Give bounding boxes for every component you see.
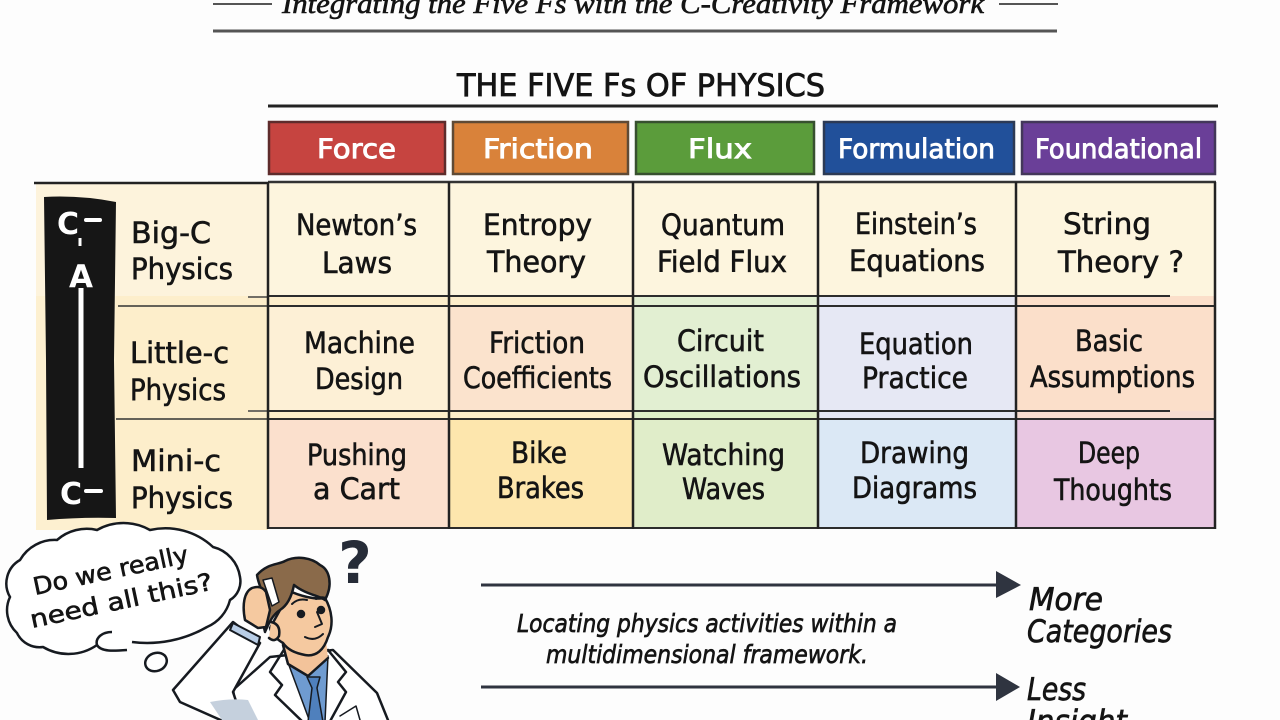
hand — [244, 587, 270, 628]
question mark: ? — [338, 529, 372, 597]
label: Less Insight: Less — [1027, 672, 1086, 708]
smile — [305, 634, 323, 639]
shirt — [287, 656, 328, 720]
cell: Friction Coefficients: Coefficients — [463, 361, 612, 395]
cell: Machine Design — [304, 326, 415, 396]
cell: Circuit Oscillations: Oscillations — [643, 360, 801, 394]
cell: Einstein's Equations: Equations — [849, 244, 985, 278]
cell: String Theory ?: Theory ? — [1057, 245, 1184, 279]
cell: Watching Waves: Watching — [662, 438, 785, 472]
cell: Entropy Theory: Theory — [486, 245, 586, 279]
scientist character — [173, 558, 392, 720]
label: Big-C Physics: Big-C — [131, 216, 211, 250]
head — [270, 590, 332, 655]
header: Friction — [453, 122, 628, 174]
label: More Categories: Categories — [1027, 614, 1172, 650]
cell: String Theory ? — [1057, 207, 1184, 279]
coat pocket — [340, 706, 360, 720]
header: Foundational — [1022, 122, 1215, 174]
cell: Newton's Laws: Laws — [322, 246, 392, 280]
brows and nose — [292, 597, 326, 627]
title: the five Fs of physics: THE FIVE Fs OF PHYSICS — [456, 68, 825, 104]
neck — [283, 640, 328, 676]
cell: Circuit Oscillations: Circuit — [677, 324, 764, 358]
cell: Einstein's Equations — [849, 207, 985, 278]
creativity scale bar: A — [69, 259, 93, 295]
header: Force: Force — [317, 134, 396, 165]
cell: Machine Design: Design — [315, 362, 403, 396]
label: Little-c Physics: Little-c — [130, 336, 229, 370]
thought bubble — [6, 523, 240, 674]
cell: Newton's Laws: Newton’s — [296, 208, 417, 242]
bubble text: need all this? — [27, 568, 215, 634]
cell: Watching Waves: Waves — [682, 472, 765, 506]
cell: Deep Thoughts: Thoughts — [1053, 473, 1172, 507]
tie — [307, 677, 323, 720]
cell: Quantum Field Flux: Field Flux — [657, 245, 787, 279]
coat lapels — [270, 648, 346, 720]
header: Force — [269, 122, 445, 174]
row label panel — [34, 183, 268, 530]
cell: String Theory ?: String — [1063, 207, 1151, 241]
cell: Entropy Theory: Entropy — [483, 208, 592, 242]
label: More Categories: More — [1029, 582, 1103, 618]
cuff — [230, 623, 260, 645]
label: Mini-c Physics — [131, 444, 233, 515]
cell: Drawing Diagrams — [852, 436, 977, 505]
cell: Pushing a Cart: Pushing — [307, 438, 407, 472]
cell: Friction Coefficients — [463, 326, 612, 395]
caption: Locating physics activities within a — [517, 609, 897, 638]
bubble text: Do we really — [30, 541, 191, 601]
cell: Entropy Theory — [483, 208, 592, 279]
cell: Quantum Field Flux: Quantum — [661, 208, 785, 242]
label: Big-C Physics: Physics — [131, 252, 233, 286]
creativity scale bar — [44, 197, 116, 520]
header: Friction: Friction — [483, 134, 593, 165]
header: Formulation — [824, 122, 1014, 174]
label: Little-c Physics: Physics — [130, 373, 226, 407]
cell: Equation Practice — [859, 327, 973, 395]
cell: Watching Waves — [662, 438, 785, 506]
cell: Quantum Field Flux — [657, 208, 787, 279]
header: Formulation: Formulation — [838, 134, 995, 165]
cell: Deep Thoughts: Deep — [1078, 436, 1140, 470]
arrow: less insight — [481, 673, 1020, 701]
ear — [269, 622, 279, 640]
arrow: more categories — [481, 571, 1021, 598]
label: Less Insight — [1027, 672, 1129, 720]
cell: Basic Assumptions: Basic — [1075, 324, 1143, 358]
label: Mini-c Physics: Mini-c — [131, 444, 221, 478]
eyes — [298, 611, 304, 617]
header: Foundational: Foundational — [1035, 134, 1202, 165]
matrix grid — [268, 182, 1216, 529]
creativity scale bar: C — [57, 207, 79, 242]
hair — [257, 558, 330, 632]
cell: Bike Brakes — [497, 436, 584, 505]
cell: Drawing Diagrams: Drawing — [860, 436, 969, 470]
label: Mini-c Physics: Physics — [131, 481, 233, 515]
sleeve — [173, 622, 260, 720]
label: Big-C Physics — [131, 216, 233, 286]
lab coat body — [233, 650, 392, 720]
caption — [517, 609, 897, 669]
cell: Friction Coefficients: Friction — [489, 326, 585, 360]
caption: multidimensional framework. — [546, 640, 868, 669]
label: More Categories — [1027, 582, 1172, 650]
header: Flux — [636, 122, 814, 174]
cell: Basic Assumptions — [1030, 324, 1195, 394]
cell: Basic Assumptions: Assumptions — [1030, 360, 1195, 394]
row 3 fills — [268, 296, 1215, 528]
cell: Einstein's Equations: Einstein’s — [855, 207, 977, 241]
cell: Machine Design: Machine — [304, 326, 415, 360]
row 2 fills — [268, 296, 1215, 411]
cell: Pushing a Cart: a Cart — [313, 472, 400, 506]
cell: Newton's Laws — [296, 208, 417, 280]
row 1 fills — [268, 183, 1215, 296]
bubble text — [27, 541, 215, 634]
cell: Equation Practice: Equation — [859, 327, 973, 361]
column headers — [269, 122, 1215, 174]
cell: Bike Brakes: Bike — [511, 436, 567, 470]
cell: Pushing a Cart — [307, 438, 407, 506]
cell: Drawing Diagrams: Diagrams — [852, 471, 977, 505]
cell: Circuit Oscillations — [643, 324, 801, 394]
label: Little-c Physics — [130, 336, 229, 407]
creativity scale bar: C — [60, 477, 82, 512]
cell: Equation Practice: Practice — [862, 361, 968, 395]
header: Flux: Flux — [688, 134, 752, 165]
cell: Bike Brakes: Brakes — [497, 471, 584, 505]
cell: Deep Thoughts — [1053, 436, 1172, 507]
paper slip — [263, 578, 279, 606]
